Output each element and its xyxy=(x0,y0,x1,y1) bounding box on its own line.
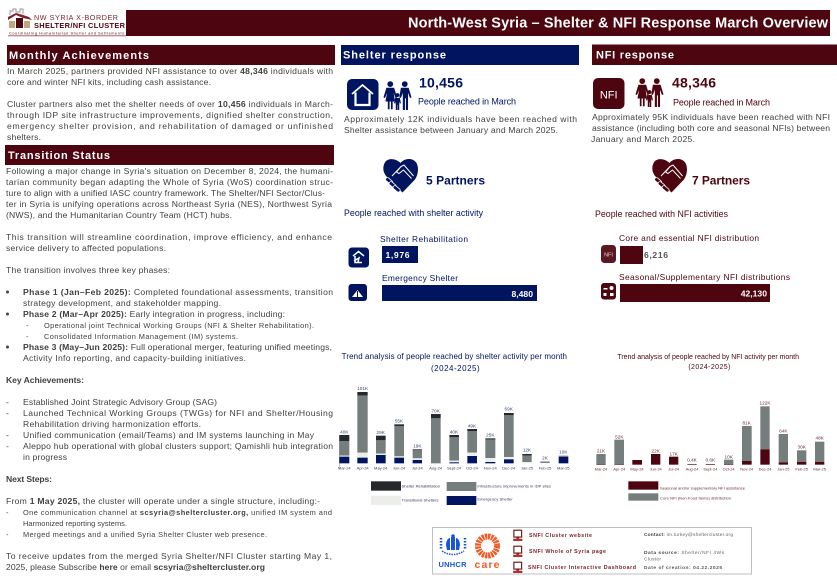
logo: UNHCR: UNHCR xyxy=(438,560,467,569)
icon: core NFI xyxy=(601,245,616,263)
text block: contact and data source: Data source: Shelter/NFI 4Ws xyxy=(644,550,725,556)
chart title: NFI trend: Trend analysis of people reached by NFI activity per month xyxy=(617,354,799,361)
bar: core NFI distribution xyxy=(619,233,759,264)
text block: shelter summary xyxy=(344,114,577,135)
list: key achievements: Established Joint Strategic Advisory Group (SAG) xyxy=(23,397,217,407)
cluster logo: SHELTER/NFI CLUSTER xyxy=(34,21,126,30)
list: transition phases: Phase 2 (Mar–Apr 2025): Early integration in progress, including: xyxy=(23,309,285,319)
axis labels: months: May-24 xyxy=(374,465,388,470)
stat: shelter partners: 5 Partners xyxy=(426,174,485,188)
bar value labels: NFI: 64K xyxy=(779,429,788,434)
bar value labels: NFI: 17K xyxy=(670,452,679,457)
bar: seasonal NFI distribution: 42,130 xyxy=(741,288,767,298)
axis labels: months: Feb-25 xyxy=(795,467,809,472)
bar value labels: shelter: 55K xyxy=(395,419,404,424)
list: transition phases: Consolidated Information Management (IM) systems. xyxy=(44,332,238,341)
axis labels: months: Mar-24 xyxy=(338,465,351,470)
chart title: shelter trend: (2024-2025) xyxy=(431,364,480,373)
cluster logo xyxy=(8,9,126,36)
bar value labels: NFI: 30K xyxy=(798,445,807,450)
axis labels: months: Jul-24 xyxy=(412,465,424,470)
text block: achievements summary: Cluster partners also met the shelter needs of over 10,456 individuals in March- xyxy=(7,99,333,109)
heading: NFI activities: People reached with NFI activities xyxy=(595,209,729,219)
heading: shelter response: Shelter response xyxy=(343,50,446,62)
icon: NFI: NFI xyxy=(600,90,618,102)
text block: transition introduction: This transition will streamline coordination, improve efficiency, and enhance xyxy=(6,232,332,242)
chart title: shelter trend: Trend analysis of people reached by shelter activity per month xyxy=(342,352,567,361)
axis labels: months: Apr-24 xyxy=(613,467,626,472)
bar: core NFI distribution: 6,216 xyxy=(644,250,668,260)
text block: achievements summary xyxy=(7,66,333,142)
bar: emergency shelter: Emergency Shelter xyxy=(382,273,458,283)
bar value labels: NFI: 0.6K xyxy=(706,458,716,463)
bar: seasonal NFI distribution: Seasonal/Supplementary NFI distributions xyxy=(619,272,790,282)
text block: achievements summary: core and winter NFI kits, including cash assistance. xyxy=(7,77,211,87)
text block: contact and data source: Cluster xyxy=(644,556,661,562)
icon: emergency shelter tent xyxy=(348,284,367,301)
links: cluster resources xyxy=(513,530,636,573)
bar value labels: shelter: 49K xyxy=(468,424,477,429)
list: transition phases: - xyxy=(26,332,29,341)
axis labels: months: Apr-24 xyxy=(357,465,369,470)
stat: shelter people reached xyxy=(418,74,516,106)
stat: NFI people reached xyxy=(672,74,770,108)
heading: transition status: Transition Status xyxy=(8,150,110,162)
list: key achievements: Aleppo hub operational with global clusters support; Qamishli hub integration xyxy=(23,441,333,451)
text block: achievements summary: through IDP site infrastructure improvements, dignified shelter construction, xyxy=(7,110,333,120)
list: next steps: One communication channel at scsyria@sheltercluster.org, unified IM system and xyxy=(23,508,332,517)
text block: NFI summary xyxy=(591,112,830,144)
list: key achievements: in progress xyxy=(23,452,67,462)
legend: shelter: Emergency Shelter xyxy=(477,496,513,501)
heading: monthly achievements: Monthly Achievements xyxy=(9,50,149,62)
chart: NFI trend xyxy=(595,354,827,501)
list: transition phases: Operational joint Technical Working Groups (NFI & Shelter Rehabilitation). xyxy=(44,321,314,330)
axis labels: months: Sept-24 xyxy=(447,465,462,470)
panel: NFI response xyxy=(591,44,837,302)
header banner xyxy=(126,10,830,36)
axis labels: months: Mar-25 xyxy=(557,465,570,470)
bar: shelter rehabilitation: Shelter Rehabilitation xyxy=(380,234,468,244)
report title: North-West Syria – Shelter & NFI Response March Overview xyxy=(408,16,829,32)
list: key achievements: - xyxy=(6,441,9,451)
text block: subscribe note: 2025, please Subscribe here or email scsyria@sheltercluster.org xyxy=(6,562,265,572)
text block: subscribe note: To receive updates from the merged Syria Shelter/NFI Cluster starting May 1, xyxy=(6,551,332,561)
list: transition phases xyxy=(6,287,333,363)
text block: transition introduction: ture to align with a unified IASC country framework. The Shelter/NFI Sector/Clus- xyxy=(6,188,325,198)
stat: NFI partners: 7 Partners xyxy=(692,174,750,188)
list: transition phases: Activity Info reporting, and capacity-building initiatives. xyxy=(23,353,246,363)
stacked bars: NFI xyxy=(596,406,824,465)
bar value labels: NFI: 0.4K xyxy=(687,458,698,463)
bar: shelter rehabilitation xyxy=(380,234,468,263)
text block: contact and data source: Date of creation: 04.22.2025 xyxy=(644,565,722,571)
logo: CARE: care xyxy=(474,559,500,571)
bar value labels: shelter: 19K xyxy=(413,444,422,449)
bar value labels: NFI: 21K xyxy=(597,449,606,454)
text block: achievements summary: In March 2025, partners provided NFI assistance to over 48,346 individuals with xyxy=(7,66,333,76)
panel: monthly achievements xyxy=(7,45,335,142)
icon: cluster houses xyxy=(8,9,32,28)
text block: achievements summary: emergency shelter provision, and rehabilitation of damaged or unfinished xyxy=(7,121,333,131)
links: cluster resources: SNFI Cluster Interactive Dashboard xyxy=(528,565,636,571)
panel: shelter response xyxy=(341,45,579,301)
axis labels: months: Jun-24 xyxy=(650,467,663,472)
axis labels: months: Oct-24 xyxy=(723,467,735,472)
axis labels: months: May-24 xyxy=(630,467,644,472)
list: next steps xyxy=(6,474,332,539)
icon: NFI xyxy=(593,78,624,109)
text block: shelter summary: Shelter assistance between January and March 2025. xyxy=(344,125,558,135)
list: next steps: Merged meetings and a unified Syria Shelter Cluster web presence. xyxy=(23,530,267,539)
icon: NFI partners handshake xyxy=(652,159,687,192)
axis labels: months: Nov-24 xyxy=(484,465,498,470)
text block: transition introduction xyxy=(6,166,333,275)
list: next steps: Harmonized reporting systems. xyxy=(23,519,127,528)
chart title: NFI trend xyxy=(617,354,799,371)
text block: subscribe note xyxy=(6,551,332,572)
bar value labels: NFI: 52K xyxy=(615,435,624,440)
list: key achievements: Rehabilitation driving harmonization efforts. xyxy=(23,419,201,429)
icon: shelter house xyxy=(347,79,378,110)
chart title: NFI trend: (2024-2025) xyxy=(688,364,730,371)
text block: NFI summary: January and March 2025. xyxy=(591,134,695,144)
text block: transition introduction: The transition involves three key phases: xyxy=(6,265,170,275)
list: key achievements: - xyxy=(6,408,9,418)
stat: NFI people reached: People reached in March xyxy=(673,98,770,108)
stat: shelter people reached: People reached in March xyxy=(418,96,516,106)
heading: transition status xyxy=(5,145,334,165)
bar value labels: NFI xyxy=(597,401,825,463)
bar value labels: shelter: 12K xyxy=(523,447,532,452)
cluster logo: NW SYRIA X-BORDER xyxy=(34,13,118,22)
bar: core NFI distribution: Core and essential NFI distribution xyxy=(619,233,759,243)
text block: contact and data source xyxy=(644,532,733,571)
icon: family xyxy=(384,81,412,110)
axis labels: months: Jan-25 xyxy=(521,465,534,470)
icon: seasonal NFI xyxy=(601,283,616,300)
list: next steps: From 1 May 2025, the cluster will operate under a single structure, including:- xyxy=(6,496,320,506)
bar value labels: shelter: 29K xyxy=(377,430,386,435)
links: cluster resources: SNFI Cluster website xyxy=(529,533,592,539)
axis labels: months: Dec-24 xyxy=(759,467,772,472)
text block: NFI summary: assistance (including both core and seasonal NFIs) between xyxy=(592,123,830,133)
bar value labels: NFI: 48K xyxy=(816,436,825,441)
axis labels: months: Mar-24 xyxy=(595,467,608,472)
axis labels: months xyxy=(338,465,570,470)
list: key achievements xyxy=(6,375,333,462)
list: next steps: Next Steps: xyxy=(6,474,52,484)
bar value labels: shelter: 10K xyxy=(559,450,568,455)
bar: seasonal NFI distribution xyxy=(619,272,790,302)
list: transition phases: Phase 1 (Jan–Feb 2025): Completed foundational assessments, transition xyxy=(23,287,333,297)
list: transition phases: Phase 3 (May–Jun 2025): Full operational merger, featuring unified meetings, xyxy=(23,342,332,352)
text block: shelter summary: Approximately 12K individuals have been reached with xyxy=(344,114,577,124)
bar value labels: NFI: 22K xyxy=(652,449,661,454)
text block: transition introduction: ter in Syria is unifying operations across Northeast Syria (NES), Northwest Syria xyxy=(6,199,332,209)
bar value labels: shelter: 101K xyxy=(357,386,369,391)
axis labels: months: Feb-25 xyxy=(539,465,552,470)
icon: shelter partners handshake xyxy=(383,159,418,192)
axis labels: months: Aug-24 xyxy=(429,465,443,470)
axis labels: months: Aug-24 xyxy=(686,467,699,472)
logo: CARE xyxy=(474,536,500,571)
bar value labels: shelter: 25K xyxy=(486,433,495,438)
text block: NFI summary: Approximately 95K individuals have been reached with NFI xyxy=(592,112,830,122)
legend: shelter: Shelter Rehabilitation xyxy=(402,484,440,489)
chart title: shelter trend xyxy=(342,352,567,373)
stat: shelter people reached: 10,456 xyxy=(419,74,463,90)
bar value labels: shelter: 69K xyxy=(505,407,514,412)
text block: transition introduction: (NWS), and the Humanitarian Country Team (HCT) hubs. xyxy=(6,210,232,220)
text block: transition introduction: Following a major change in Syria's situation on December 8, 2024, the humani- xyxy=(6,166,333,176)
panel: transition status xyxy=(5,145,334,572)
list: key achievements: - xyxy=(6,397,9,407)
stat: NFI people reached: 48,346 xyxy=(672,74,716,90)
stacked bars: shelter xyxy=(339,392,568,463)
bar value labels: NFI: 122K xyxy=(760,401,771,406)
heading: NFI response: NFI response xyxy=(596,50,674,62)
cluster logo: Coordinating Humanitarian Shelter and Settlements xyxy=(9,32,124,36)
axis labels: months: Jun-24 xyxy=(393,465,406,470)
legend: NFI: Core NFI (Non-Food Items) distribution xyxy=(660,496,731,501)
icon: family xyxy=(636,78,664,107)
list: next steps: - xyxy=(6,530,9,539)
list: transition phases: - xyxy=(26,321,29,330)
text block: transition introduction: service delivery to affected populations. xyxy=(6,243,166,253)
icon: laptop xyxy=(513,562,522,574)
axis labels: months: Jan-25 xyxy=(777,467,790,472)
axis labels: months: Mar-25 xyxy=(813,467,827,472)
legend: NFI: Seasonal and/or supplementary NFI assistance xyxy=(660,486,746,491)
bar: shelter rehabilitation: 1,976 xyxy=(386,250,410,260)
list: key achievements: Launched Technical Working Groups (TWGs) for NFI and Shelter/Housing xyxy=(23,408,333,418)
chart: shelter trend xyxy=(338,352,570,505)
text block: contact and data source: Contact: im.turkey@sheltercluster.org xyxy=(644,532,733,538)
legend: shelter xyxy=(371,481,551,505)
bar value labels: NFI: 10K xyxy=(725,455,734,460)
heading: shelter response xyxy=(341,45,579,65)
logo: UNHCR xyxy=(438,534,467,569)
list: key achievements: Key Achievements: xyxy=(6,375,84,385)
bar value labels: shelter: 70K xyxy=(432,409,441,414)
bar value labels: shelter: 40K xyxy=(340,430,349,435)
bar value labels: shelter xyxy=(340,386,568,461)
bar: emergency shelter: 8,480 xyxy=(511,289,533,299)
list: next steps: - xyxy=(6,508,9,517)
list: transition phases: strategy development, and stakeholder mapping. xyxy=(23,298,221,308)
links: cluster resources: SNFI Whole of Syria page xyxy=(529,549,606,555)
axis labels: months xyxy=(595,467,827,472)
axis labels: months: Sept-24 xyxy=(703,467,718,472)
heading: NFI response xyxy=(592,44,837,65)
icon: laptop xyxy=(513,530,522,542)
axis labels: months: Oct-24 xyxy=(466,465,479,470)
bar value labels: shelter: 40K xyxy=(450,430,459,435)
bar value labels: shelter: 2K xyxy=(542,456,549,461)
icon: laptop xyxy=(513,546,522,558)
icon: shelter rehabilitation xyxy=(348,248,369,268)
bar: emergency shelter xyxy=(382,273,537,301)
heading: monthly achievements xyxy=(7,45,335,65)
bar value labels: NFI: 81K xyxy=(743,421,752,426)
axis labels: months: Dec-24 xyxy=(502,465,516,470)
legend: shelter: Infrastructure improvements in IDP sites xyxy=(477,484,551,489)
legend: shelter: Transitional Shelters xyxy=(402,498,438,503)
list: key achievements: Unified communication (email/Teams) and IM systems launching in May xyxy=(23,430,315,440)
axis labels: months: Jul-24 xyxy=(668,467,680,472)
list: key achievements: - xyxy=(6,430,9,440)
axis labels: months: Nov-24 xyxy=(740,467,754,472)
panel: footer xyxy=(432,528,752,574)
text block: achievements summary: shelters. xyxy=(7,132,41,142)
text block: transition introduction: tarian community began adapting the Whole of Syria (WoS) coordination struc- xyxy=(6,177,333,187)
heading: shelter activity: People reached with shelter activity xyxy=(344,208,484,218)
icon: core NFI: NFI xyxy=(604,252,613,258)
legend: NFI xyxy=(628,481,746,501)
